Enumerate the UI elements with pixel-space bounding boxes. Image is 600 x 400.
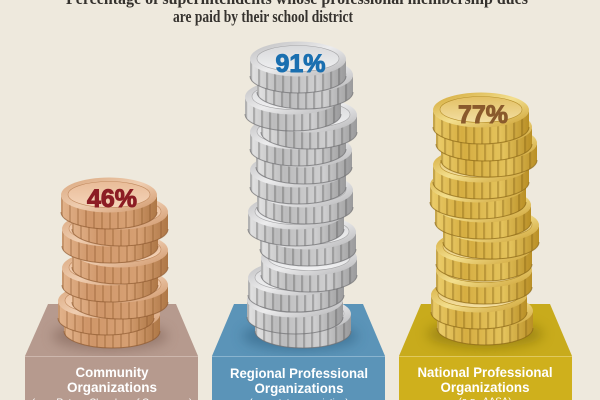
panel: community organizations pedestal <box>25 304 198 400</box>
percentage label 77%: 77% <box>458 101 508 129</box>
panel: national professional organizations pedestal: Organizations <box>440 379 530 395</box>
percentage label 91%: 91% <box>275 50 326 78</box>
panel: national professional organizations pedestal <box>399 304 572 400</box>
title: are paid by their school district <box>173 7 353 26</box>
silver coin stack 91% <box>245 42 357 348</box>
panel: national professional organizations pedestal: National Professional <box>418 364 552 380</box>
panel: regional professional organizations pedestal <box>212 304 385 400</box>
gold coin stack 77% <box>430 92 539 345</box>
percentage label 46%: 46% <box>87 185 137 213</box>
panel: community organizations pedestal: Community <box>76 364 149 380</box>
panel: community organizations pedestal: Organizations <box>67 379 157 395</box>
copper coin stack 46% <box>58 178 168 348</box>
title <box>66 0 528 26</box>
panel: regional professional organizations pedestal: Organizations <box>254 380 344 396</box>
panel: regional professional organizations pedestal: Regional Professional <box>230 365 368 381</box>
